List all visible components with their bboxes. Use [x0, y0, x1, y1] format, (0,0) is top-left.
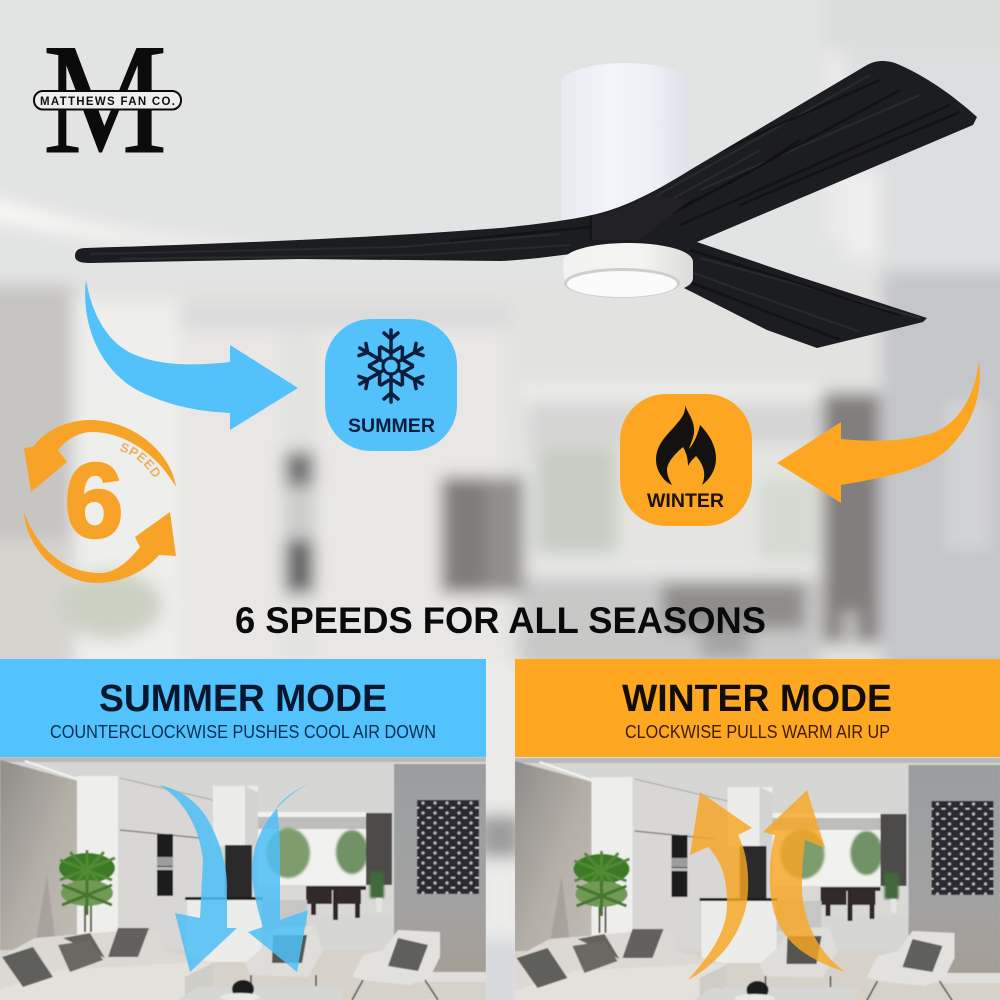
numeral 6: 6 [65, 442, 123, 560]
summer mode subtitle: COUNTERCLOCKWISE PUSHES COOL AIR DOWN [50, 722, 436, 742]
summer badge [325, 319, 457, 451]
winter badge [620, 394, 752, 526]
winter room photo [514, 758, 1000, 1000]
winter label: WINTER [647, 490, 724, 512]
top rotation arrow [24, 420, 176, 492]
light kit ring [563, 243, 693, 298]
ceiling fan [75, 61, 977, 348]
winter arrow [777, 360, 980, 503]
winter mode subtitle: CLOCKWISE PULLS WARM AIR UP [625, 722, 890, 742]
icon: flame [656, 405, 716, 485]
fan canopy [561, 63, 689, 225]
speed label: SPEED [120, 443, 160, 477]
winter airflow arrows [688, 790, 845, 980]
logo: Matthews Fan Co.: M [43, 12, 167, 187]
summer mode title: SUMMER MODE [99, 678, 387, 720]
winter mode title: WINTER MODE [622, 678, 892, 720]
summer airflow arrows [160, 782, 312, 972]
6 speed badge [24, 420, 176, 583]
summer label: SUMMER [348, 415, 435, 437]
summer arrow [85, 280, 298, 430]
summer header band [0, 659, 486, 757]
panel: winter mode [514, 659, 1000, 1000]
summer room photo [0, 757, 486, 1000]
main heading: 6 SPEEDS FOR ALL SEASONS [235, 599, 766, 641]
logo: Matthews Fan Co.: MATTHEWS FAN CO. [40, 96, 175, 108]
bottom rotation arrow [24, 512, 176, 583]
panel: summer mode [0, 659, 486, 1000]
winter header band [515, 659, 1000, 757]
icon: snowflake [355, 330, 427, 402]
fan blades [75, 61, 977, 348]
